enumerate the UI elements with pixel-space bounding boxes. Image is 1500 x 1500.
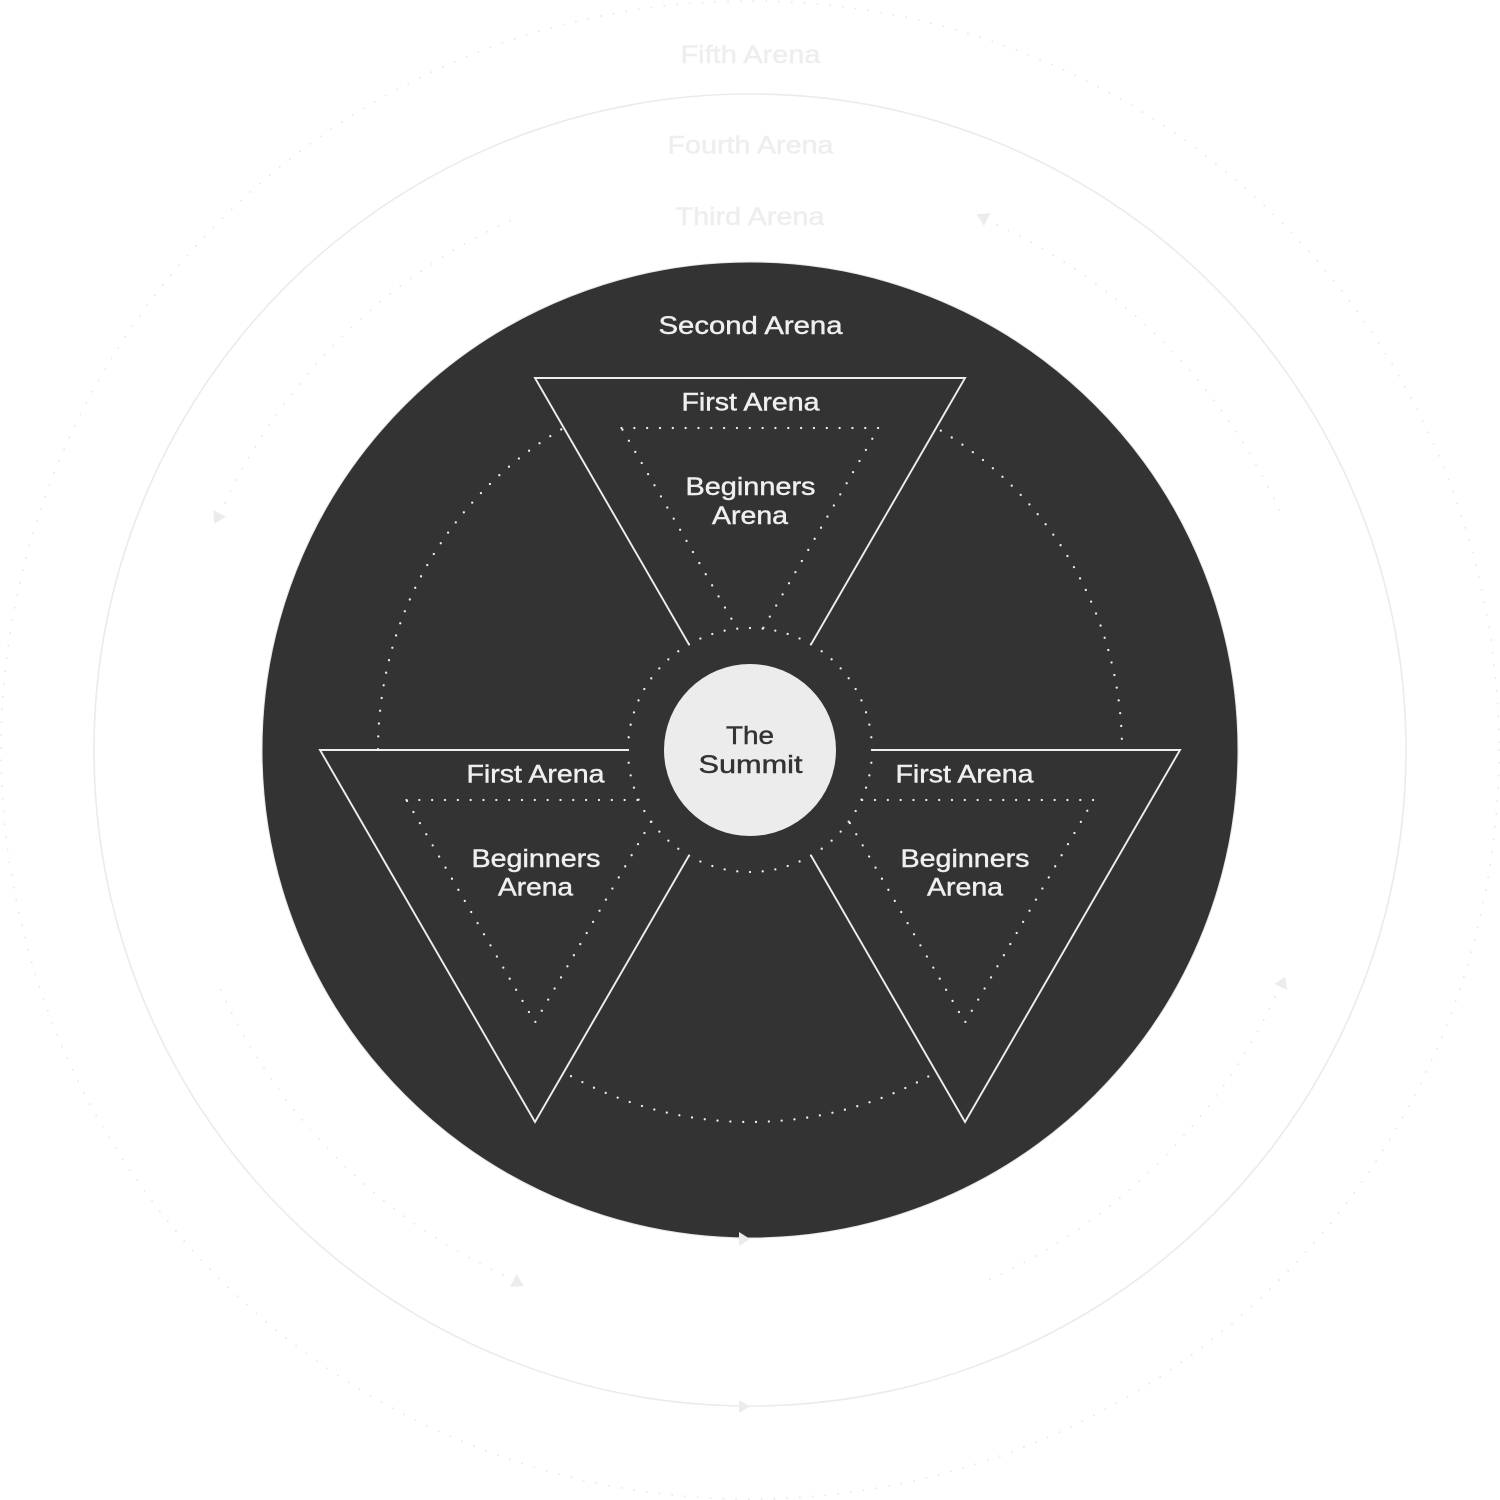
first arena triangle outline — [320, 750, 750, 1122]
label: Fourth Arena: Fourth Arena — [668, 132, 834, 160]
beginners arena dotted triangle — [836, 800, 1094, 1022]
panel: top triangle — [535, 378, 965, 750]
label: Beginners Arena: Arena — [498, 874, 573, 902]
label: The Summit: The — [726, 722, 774, 750]
dark hub covering triangle apexes, with dotted ring — [628, 628, 872, 872]
label: The Summit: Summit — [698, 751, 803, 779]
first arena triangle outline — [535, 378, 965, 750]
label: Beginners Arena: Arena — [712, 502, 788, 530]
beginners arena dotted triangle — [406, 800, 664, 1022]
label: Beginners Arena: Beginners — [686, 473, 816, 501]
arrow: upper right — [977, 213, 990, 226]
label: First Arena: First Arena — [682, 388, 820, 416]
label: First Arena: First Arena — [466, 760, 605, 788]
label: Beginners Arena: Beginners — [900, 845, 1030, 873]
arrow: lower right — [1274, 977, 1287, 990]
arrow: upper left — [213, 510, 226, 524]
first arena triangle outline — [750, 750, 1180, 1122]
panel: lower left triangle — [320, 750, 750, 1122]
label: Beginners Arena: Arena — [927, 874, 1003, 902]
arrow: lower left — [510, 1274, 524, 1287]
label: First Arena: First Arena — [896, 760, 1034, 788]
dotted arcs: third arena rotation — [218, 218, 1282, 1282]
label: Beginners Arena: Beginners — [472, 845, 600, 873]
label: Fifth Arena: Fifth Arena — [680, 41, 821, 69]
arrow: on dark disc bottom — [739, 1232, 750, 1246]
summit disc — [664, 664, 836, 836]
dotted ring: first arena rotation — [378, 378, 1122, 1122]
beginners arena dotted triangle — [622, 428, 878, 651]
arrow: on solid ring bottom — [739, 1400, 750, 1413]
label: Third Arena: Third Arena — [676, 203, 825, 231]
panel: second arena dark disc — [262, 262, 1238, 1238]
panel: lower right triangle — [750, 750, 1180, 1122]
label: Second Arena: Second Arena — [658, 312, 843, 340]
solid ring: fourth arena boundary — [94, 94, 1406, 1406]
panel: The Summit — [664, 664, 836, 836]
